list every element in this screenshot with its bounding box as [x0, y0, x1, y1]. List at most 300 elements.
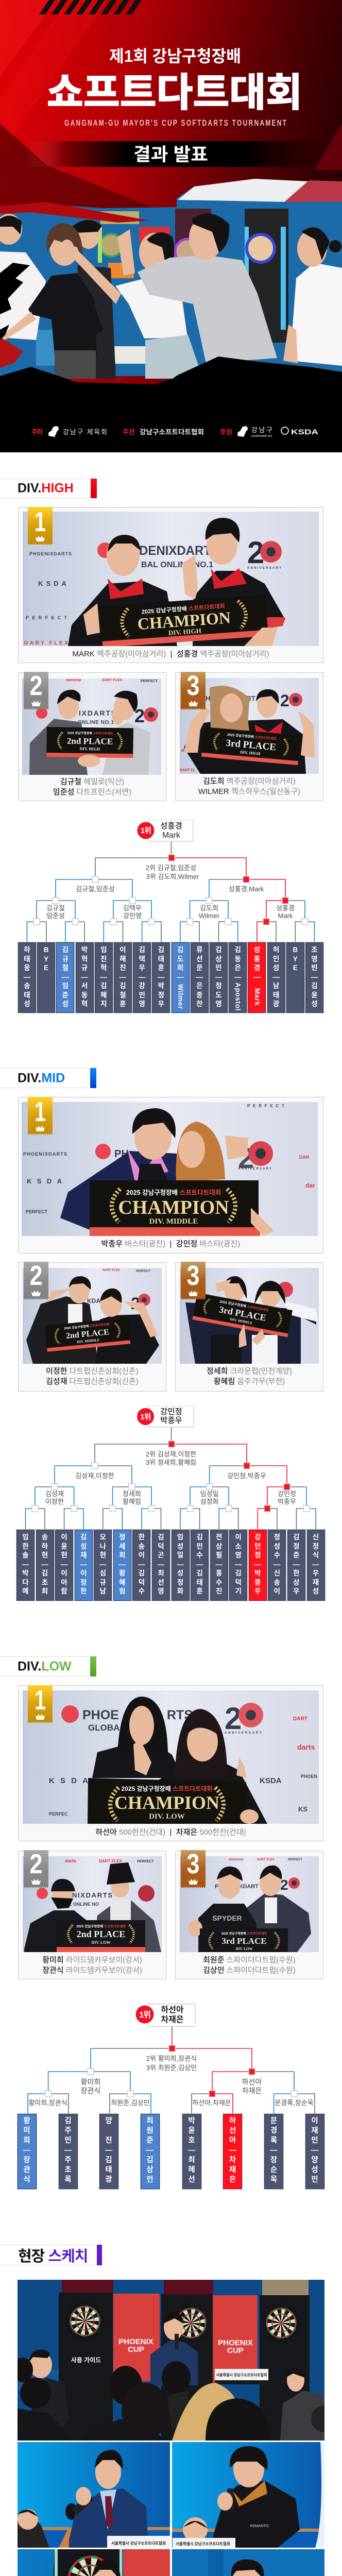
photo: high third place: [180, 678, 319, 774]
entrant: champion: 성홍경—: [253, 946, 261, 981]
section heading: DIV.HIGH: DIV.HIGH: [18, 481, 74, 496]
left player: [188, 1867, 256, 1952]
caption: [203, 1956, 296, 1975]
panel: low third: [175, 1851, 323, 1979]
champion sign: CHAMPION: [114, 1792, 219, 1813]
caption: 황혜림 음주가무(부천): [214, 1377, 285, 1386]
entrant: champion: 하선아—차재은: [229, 2116, 236, 2183]
photo: opening speech: [18, 2280, 324, 2441]
name plate: [107, 2536, 170, 2548]
photo: mid third place: [180, 1268, 319, 1364]
photo: high second place: 2: [134, 705, 145, 726]
entrant: [229, 1530, 247, 1601]
photo: mid second place: KDA: [87, 1297, 100, 1304]
panel: high champion: [18, 507, 323, 663]
left woman: [92, 1697, 182, 1778]
caption: 임준성 다트프린스(서면): [53, 788, 131, 796]
right man: [102, 691, 150, 775]
section heading: DIV.MID: [0, 1068, 96, 1088]
photo: high champions: DENIXDART: [139, 544, 211, 558]
photo: mid second place: [23, 1268, 162, 1364]
caption: 최원준 스파이더다트펍(수원): [203, 1956, 296, 1964]
winner box: [137, 1405, 194, 1427]
rank badge: 1: 1: [35, 1685, 46, 1716]
photo: mid champions: DAR: [299, 1154, 309, 1159]
entrant: [95, 942, 113, 1013]
sponsors row: 주최: [31, 428, 43, 436]
entrant: 이재민—양성민: [311, 2116, 318, 2183]
panel: mid champion: [18, 1097, 323, 1253]
entrant: 김덕곤—최선영: [158, 1533, 164, 1595]
entrant: 이해진—김철훈: [119, 946, 126, 1008]
final results text: 성홍경: [276, 904, 295, 912]
winner box: [136, 2004, 195, 2027]
entrant: 김민수—김태훈: [196, 1533, 203, 1595]
photo: low third place: 2: [280, 1877, 288, 1893]
entrant: [37, 942, 55, 1013]
entrant: 오나현—심규남: [99, 1533, 107, 1595]
photo: high champions: DART FLEX: [24, 640, 68, 646]
photo: guest portrait: [172, 2549, 324, 2576]
man in grey sweatshirt: [138, 214, 277, 363]
right player: [94, 1862, 161, 1952]
final results text: 황미희: [81, 2078, 100, 2086]
entrant: [268, 1530, 286, 1601]
final results text: 김규철: [46, 904, 65, 912]
panel: low champion: [18, 1685, 323, 1841]
bracket: DIV.HIGH: [18, 820, 324, 1013]
entrant: semifinalist: [113, 1530, 131, 1601]
entrant: 류선문—은종찬: [196, 946, 203, 1008]
photo: low second place: [23, 1856, 162, 1952]
top stripes: [39, 0, 142, 14]
photo: high third place: DART FL: [180, 769, 196, 772]
entrant: semifinalist: [140, 2114, 160, 2189]
final results text: 2위 황미희,장관식: [146, 2055, 197, 2062]
man: [60, 1108, 197, 1229]
photo: low third place: [180, 1856, 319, 1952]
photo: high champions: ANNIVERSARY: [247, 567, 281, 570]
entrant: 문경록—장순욱: [270, 2116, 278, 2183]
seated people: [29, 2349, 324, 2441]
entrant: [114, 942, 132, 1013]
final results text: 강민정: [278, 1490, 296, 1498]
entrant: [191, 942, 209, 1013]
right woman: [90, 1709, 267, 1824]
final results text: 김택우: [123, 904, 142, 912]
entrant: semifinalist: 정세희—황혜림: [119, 1533, 126, 1595]
champion sign: 2025 강남구청장배 스프트다트대회: [141, 602, 225, 615]
winner box: 강민정: [160, 1407, 182, 1416]
rank badge: 3: [181, 1850, 206, 1888]
name plate: 서울특별시 강남구소프트다트협회: [111, 2540, 166, 2546]
players: [184, 686, 315, 774]
champion sign: [100, 595, 268, 648]
winner box: 1위: [139, 2010, 150, 2020]
panel: high second: [18, 672, 166, 801]
photo: high second place: IXDARTS: [79, 709, 116, 717]
entrant: 이윤현—이아람: [61, 1533, 67, 1595]
photo: high second place: dartshop: [66, 679, 81, 682]
entrant: [307, 1530, 324, 1601]
entrant: champion: [223, 2114, 242, 2189]
entrant: champion: Mark: [253, 988, 261, 1006]
sponsors row: 강남구 체육회: [63, 428, 107, 436]
winner box: 1위: [140, 1413, 151, 1421]
photo: high champions: BAL ONLINE NO.1: [141, 561, 213, 569]
final results text: 성정화: [200, 1498, 219, 1505]
entrant: finalist: [18, 2114, 36, 2189]
speaker: [150, 2313, 198, 2385]
entrant: 김정준—한상우: [293, 1533, 300, 1595]
audience: [12, 2358, 338, 2441]
second place sign: 2025 강남구청장배 스프트다트대회: [64, 1322, 110, 1330]
final results text: 2위 김성재,이정한: [146, 1450, 196, 1458]
rank badge: 2: [24, 1262, 48, 1300]
name plate: 서울특별시 강남구소프트다트협회: [216, 2372, 267, 2377]
entrant: [59, 2114, 77, 2189]
panel: mid second: [18, 1262, 166, 1392]
entrant: 한송이—김덕수: [138, 1533, 145, 1595]
section heading: field sketch: 현장 스케치: [18, 2248, 88, 2265]
second place sign: DIV. LOW: [91, 1940, 111, 1945]
left player: [26, 1276, 98, 1364]
right player: [96, 1289, 159, 1364]
photo: mid champions: KSDA: [27, 1177, 62, 1185]
entrant: 정성수—신송이: [273, 1533, 281, 1595]
caption: 정세희 크라운펍(인천계양): [207, 1367, 292, 1376]
final results text: 강민영: [123, 912, 142, 920]
caption: WILMER 젝스하우스(일산동구): [198, 787, 300, 796]
thrower in black: [0, 223, 103, 379]
photo: low second place: PERFECT: [137, 1860, 154, 1863]
entrant: 양: [105, 2116, 112, 2125]
entrant: 김태훈—박정우: [158, 946, 165, 1008]
caption: [198, 777, 300, 796]
speaker in team shirt: [213, 2446, 300, 2548]
sponsors row: 주관: [123, 428, 135, 436]
third place sign: 2025 강남구청장배 스프트다트대회: [219, 1299, 269, 1313]
speaker: [69, 2450, 148, 2548]
photo: low champions: KSDA: [260, 1776, 282, 1785]
champion sign: [88, 1778, 246, 1824]
panel: high third: [175, 672, 323, 801]
man left: [68, 535, 177, 646]
entrant: [264, 2114, 283, 2189]
entrant: 박윤호—최혜선: [188, 2116, 195, 2183]
photo: mid champions: ANNIVERSARY: [238, 1167, 271, 1171]
photo: high third place: 2: [280, 691, 289, 710]
second place sign: [57, 1920, 145, 1952]
final results text: 이정한: [45, 1498, 64, 1505]
caption: 하선아 500한잔(건대) | 차재은 500한잔(건대): [95, 1828, 246, 1837]
entrant: BYE: [44, 946, 49, 972]
winner box: 1위: [141, 826, 151, 835]
final results text: 성홍경,Mark: [229, 885, 264, 893]
bracket: DIV.LOW: [17, 2004, 325, 2190]
woman in white: [60, 229, 203, 379]
final results text: Wilmer: [199, 912, 220, 920]
entrant: champion: [249, 1530, 267, 1601]
entrant: [229, 942, 247, 1013]
speaker in team shirt: ROMANTIC: [250, 2524, 269, 2528]
man with bun: [283, 227, 342, 366]
entrant: [191, 1530, 209, 1601]
photo: low champions: 2: [225, 1701, 242, 1736]
entrant: 송하현—김초희: [41, 1533, 48, 1595]
photo: association speaker: [18, 2549, 170, 2576]
entrant: [305, 942, 323, 1013]
third place sign: 3rd PLACE: [221, 1936, 267, 1946]
final results text: 임준성: [46, 912, 65, 920]
section heading: field sketch: [0, 2245, 102, 2265]
final results text: Mark: [278, 912, 293, 920]
photo: mid champions: 2: [238, 1142, 254, 1174]
entrant: [210, 1530, 228, 1601]
winner box: [137, 820, 193, 841]
rank badge: 3: [181, 672, 206, 710]
entrant: [132, 1530, 150, 1601]
final results text: 3위 정세희,황혜림: [146, 1459, 196, 1466]
final results text: 강민정,박종우: [227, 1472, 266, 1480]
photo: mid champions: PERFECT: [247, 1104, 284, 1108]
caption: 박종우 바스타(광진) | 강민정 바스타(광진): [101, 1240, 240, 1248]
final results text: 황혜림: [123, 1498, 141, 1505]
entrant: [133, 942, 151, 1013]
entrant: 김택우—강민영: [139, 946, 145, 1008]
photo: low champions: PHOE: [82, 1708, 119, 1722]
second place sign: 2nd PLACE: [65, 1328, 110, 1341]
third place sign: DIV. HIGH: [240, 750, 261, 756]
rank badge: 1: 1: [35, 507, 46, 537]
photo: low champions: KS: [298, 1805, 307, 1813]
entrant: 박혁규—서동혁: [81, 946, 88, 1008]
entrant: [152, 942, 170, 1013]
entrant: semifinalist: [172, 942, 190, 1013]
photo: low champions: PERFEC: [49, 1811, 68, 1817]
final results text: [46, 864, 295, 920]
entrant: 신정식—우재성: [312, 1533, 319, 1595]
champion sign: DIV. HIGH: [168, 626, 201, 637]
photo: high champions: [23, 512, 319, 646]
champion sign: DIV. LOW: [149, 1812, 185, 1821]
second place sign: DIV. MIDDLE: [77, 1338, 100, 1344]
section heading: DIV.LOW: [0, 1656, 96, 1676]
third place sign: [192, 1293, 293, 1337]
name plate: 서울특별시 강남구소프트다트협회: [176, 2541, 230, 2546]
photo: speaker portrait: [18, 2442, 170, 2548]
entrant: [287, 1530, 305, 1601]
photo: mid champions: PH: [114, 1148, 128, 1159]
caption: 김도희 맥주공장(미아삼거리): [203, 777, 296, 786]
result strip: [26, 141, 342, 167]
entrant: [286, 942, 304, 1013]
entrant: finalist: 김규철—임준성: [62, 946, 69, 1008]
third place sign: DIV. MIDDLE: [230, 1317, 253, 1325]
left player: SPYDER: [212, 1914, 242, 1922]
photo: high third place: ART: [242, 694, 255, 702]
final results text: 3위 최원준,김상민: [146, 2064, 197, 2072]
second place sign: 2025 강남구청장배 스프트다트대회: [76, 1924, 126, 1928]
third place sign: DIV. LOW: [236, 1947, 252, 1951]
winner box: 차재은: [161, 2015, 184, 2024]
rank badge: 1: [28, 507, 53, 545]
photo: mid champions: [22, 1102, 318, 1236]
photo: low champions: RTS: [167, 1708, 193, 1722]
photo: high champions: KSDA: [38, 580, 67, 587]
photo: mid second place: DART FLEX: [102, 1269, 120, 1272]
champion sign: [90, 1180, 260, 1235]
photo: high second place: [22, 679, 161, 775]
photo: low champions: ANNIVERSARY: [225, 1732, 262, 1735]
photo: low third place: P: [215, 1884, 218, 1890]
photo: low second place: DART FLEX: [99, 1859, 123, 1863]
final results text: 정세희: [123, 1490, 141, 1498]
second place sign: [45, 1317, 130, 1352]
photo: mid second place: PERFECT: [136, 1270, 150, 1273]
entrant: [55, 1530, 73, 1601]
entrant: 김주민—주초록: [64, 2116, 72, 2183]
entrant: 이소영—김덕기: [235, 1533, 242, 1595]
final results text: 최원준,김상민: [111, 2099, 150, 2107]
caption: 김규철 헤일로(익산): [60, 777, 124, 786]
final results text: 하선아: [242, 2078, 262, 2086]
title line one: 제1회 강남구청장배: [109, 47, 241, 65]
section heading: DIV.MID: DIV.MID: [18, 1071, 65, 1085]
rank badge: 1: [28, 1097, 53, 1135]
second place sign: DIV. HIGH: [80, 747, 100, 751]
woman: [176, 1121, 248, 1182]
english title: GANGNAM-GU MAYOR'S CUP SOFTDARTS TOURNAMENT: [64, 118, 286, 128]
entrant: [210, 942, 228, 1013]
entrant: Apostol: [234, 982, 242, 1011]
guest: [197, 2560, 281, 2576]
entrant: 임진혁—김혜지: [100, 946, 107, 1008]
bracket lines, nodes and labels: [27, 820, 315, 942]
final results text: 김규철,임준성: [76, 885, 115, 893]
final results text: 3위 김도희,Wilmer: [146, 873, 199, 880]
left man: [29, 690, 88, 775]
photo: low champions: DART: [293, 1716, 307, 1722]
torn black lower edge: [0, 357, 342, 452]
caption: MARK 맥주공장(미아삼거리) | 성홍경 맥주공장(미아삼거리): [72, 650, 269, 658]
sponsors row: [31, 426, 318, 438]
sponsors row: GANGNAM GU: [251, 435, 272, 438]
photo: team member speaking: [172, 2442, 324, 2548]
final results text: 2위 김규철,임준성: [146, 864, 196, 872]
champion sign: 2025 강남구청장배 스프트다트대회: [122, 1785, 212, 1792]
entrant: [305, 2114, 324, 2189]
sponsors row: 강남구: [251, 426, 272, 434]
photo: high champions: PHOENIXDARTS: [29, 551, 72, 556]
photo: low third place: dartsshop: [229, 1858, 244, 1861]
sponsors row: KSDA: [291, 428, 318, 436]
entrant: champion: [248, 942, 266, 1013]
caption: [46, 1367, 139, 1386]
entrant: 김상민—정도영: [215, 946, 222, 1008]
entrant: 전상필—홍수진: [215, 1533, 223, 1595]
photo: high second place: PERFECT: [141, 680, 158, 683]
players: [185, 1276, 318, 1364]
entrant: champion: 강민정—박종우: [254, 1533, 261, 1595]
rank badge: 2: [24, 1850, 48, 1888]
sponsors row: 강남구소프트다트협회: [140, 428, 204, 436]
caption: 김상민 스파이더다트펍(수원): [203, 1966, 296, 1975]
photo: low third place: XDART: [239, 1884, 259, 1890]
rank badge: 3: [181, 1262, 206, 1300]
final results text: 박종우: [278, 1498, 296, 1505]
section heading: DIV.HIGH: [0, 479, 97, 498]
final results text: 하선아,차재은: [192, 2099, 231, 2107]
final results text: 임성일: [200, 1490, 219, 1498]
entrant: 하태웅—송태성: [24, 946, 30, 1008]
hero banner: [0, 0, 342, 452]
rank badge: 1: 1: [35, 1097, 46, 1127]
entrant: finalist: [56, 942, 74, 1013]
entrant: [18, 942, 36, 1013]
man right: [182, 518, 285, 646]
champion sign: CHAMPION: [137, 608, 231, 633]
entrant: [76, 942, 94, 1013]
caption: 김성재 다트펍신촌상회(신촌): [46, 1377, 139, 1386]
hero photo: [0, 179, 342, 379]
champion sign: CHAMPION: [118, 1196, 229, 1218]
caption: 황미희 라이드뎀카우보이(강서): [42, 1956, 142, 1964]
photo: mid second place: 2: [131, 1294, 140, 1313]
bracket: DIV.MID: [16, 1405, 326, 1601]
final results text: 김도희: [200, 904, 218, 912]
entrant: 김동은—: [234, 946, 241, 981]
name plate: [173, 2538, 235, 2548]
entrant: [171, 1530, 190, 1601]
third place sign: [200, 1928, 288, 1952]
speaker: [69, 2560, 154, 2576]
entrant: [94, 1530, 112, 1601]
photo: high champions: PERFECT: [26, 615, 67, 620]
third place sign: 2025 강남구청장배 스프트다트대회: [227, 732, 277, 741]
name plate: [215, 2369, 271, 2384]
photo: high third place: HC: [206, 694, 215, 702]
caption: [42, 1956, 142, 1975]
photo: low second place: NIXDARTS: [72, 1891, 112, 1899]
rank badge: 1: [28, 1685, 53, 1723]
entrant: finalist: 김성재—이정한: [80, 1533, 87, 1595]
rank badge: 2: [24, 672, 48, 710]
photo: high second place: DART FLEX: [102, 679, 123, 682]
sponsors row: 후원: [220, 428, 232, 436]
entrant: [16, 1530, 35, 1601]
champion sign: DIV. MIDDLE: [149, 1217, 198, 1225]
photo: low third place: DART FLEX: [257, 1858, 275, 1861]
third place sign: [201, 727, 300, 765]
photo: low champions: KSDA: [49, 1776, 88, 1785]
final results text: 문경록,장순욱: [275, 2099, 314, 2107]
panel: low second: [18, 1851, 166, 1979]
photo: high second place: ONLINE NO.1: [78, 720, 114, 725]
entrant: BYE: [293, 946, 298, 972]
entrant: 조영빈—김윤성: [311, 946, 318, 1008]
bracket lines, nodes and labels: [27, 2004, 315, 2113]
final results text: 차재은: [242, 2087, 262, 2095]
photo: opening speech: CUP: [227, 2346, 244, 2355]
photo: high champions: 2: [247, 535, 264, 570]
winner box: 박종우: [160, 1416, 182, 1425]
left player: [24, 1879, 87, 1952]
photo: low champions: GLOBA: [88, 1723, 119, 1733]
final results text: 김성재,이정한: [75, 1472, 114, 1480]
second place sign: 2025 강남구청장배 스프트다트대회: [67, 731, 113, 736]
entrant: 임한솔—박다예: [22, 1533, 29, 1595]
